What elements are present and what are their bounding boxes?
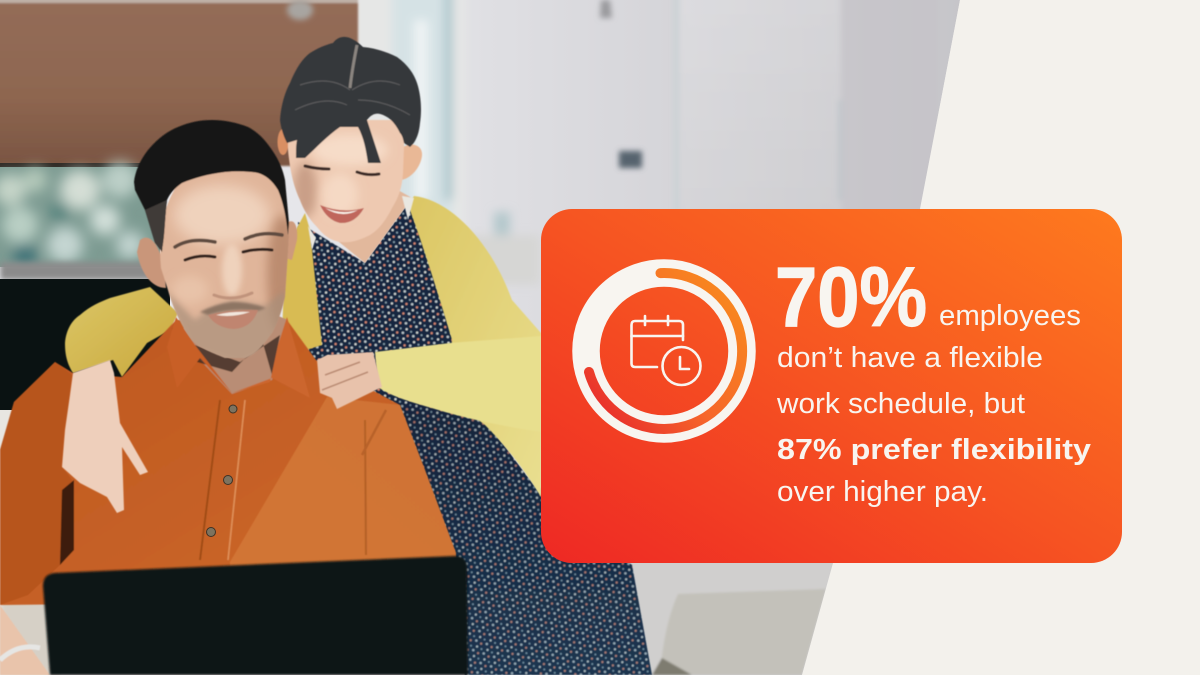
icon: calendar with clock — [632, 316, 700, 385]
chart: progress ring — [586, 273, 742, 429]
text block: statistic description: work schedule, but — [776, 388, 1025, 420]
eyes and smile — [305, 166, 379, 175]
photo: father and daughter at a laptop — [0, 0, 960, 675]
right shoulder — [230, 397, 456, 580]
daughter: cardigan — [65, 196, 541, 497]
father: shirt — [0, 300, 456, 605]
photo backdrop: blurred room — [0, 0, 960, 675]
eyes and brows — [175, 234, 282, 298]
moustache — [200, 302, 266, 315]
text block: statistic description: over higher pay. — [777, 476, 988, 508]
face — [288, 120, 405, 242]
laptop — [43, 556, 468, 675]
text block: statistic description: employees — [939, 300, 1081, 332]
hair — [280, 37, 421, 163]
text block: statistic description: 87% prefer flexibility — [777, 434, 1091, 466]
sofa cushion — [630, 555, 836, 675]
collar — [167, 317, 232, 393]
daughter: head — [278, 37, 422, 263]
daughter: hands — [62, 352, 382, 513]
neck — [318, 190, 412, 263]
left sleeve — [0, 362, 74, 605]
wood panel — [0, 0, 358, 166]
father: head — [134, 120, 299, 365]
text block: statistic description: don’t have a flexible — [777, 342, 1043, 374]
bracelet arm — [0, 605, 50, 675]
statistic: 70%: 70% — [775, 250, 927, 344]
neck — [180, 300, 288, 394]
daughter: dress — [298, 198, 652, 675]
face — [160, 165, 289, 358]
text block: statistic description — [776, 300, 1091, 508]
panel: orange statistic card — [541, 209, 1122, 563]
far arm sleeve — [65, 287, 178, 377]
near arm sleeve — [375, 336, 541, 432]
shirt buttons — [206, 405, 237, 536]
face shading — [170, 180, 290, 358]
cream diagonal panel — [802, 0, 1200, 675]
blurred garden window — [0, 163, 160, 169]
ears — [278, 129, 288, 155]
mouth — [208, 310, 258, 329]
ears — [137, 238, 166, 288]
hair — [134, 120, 289, 250]
window column — [355, 0, 540, 285]
